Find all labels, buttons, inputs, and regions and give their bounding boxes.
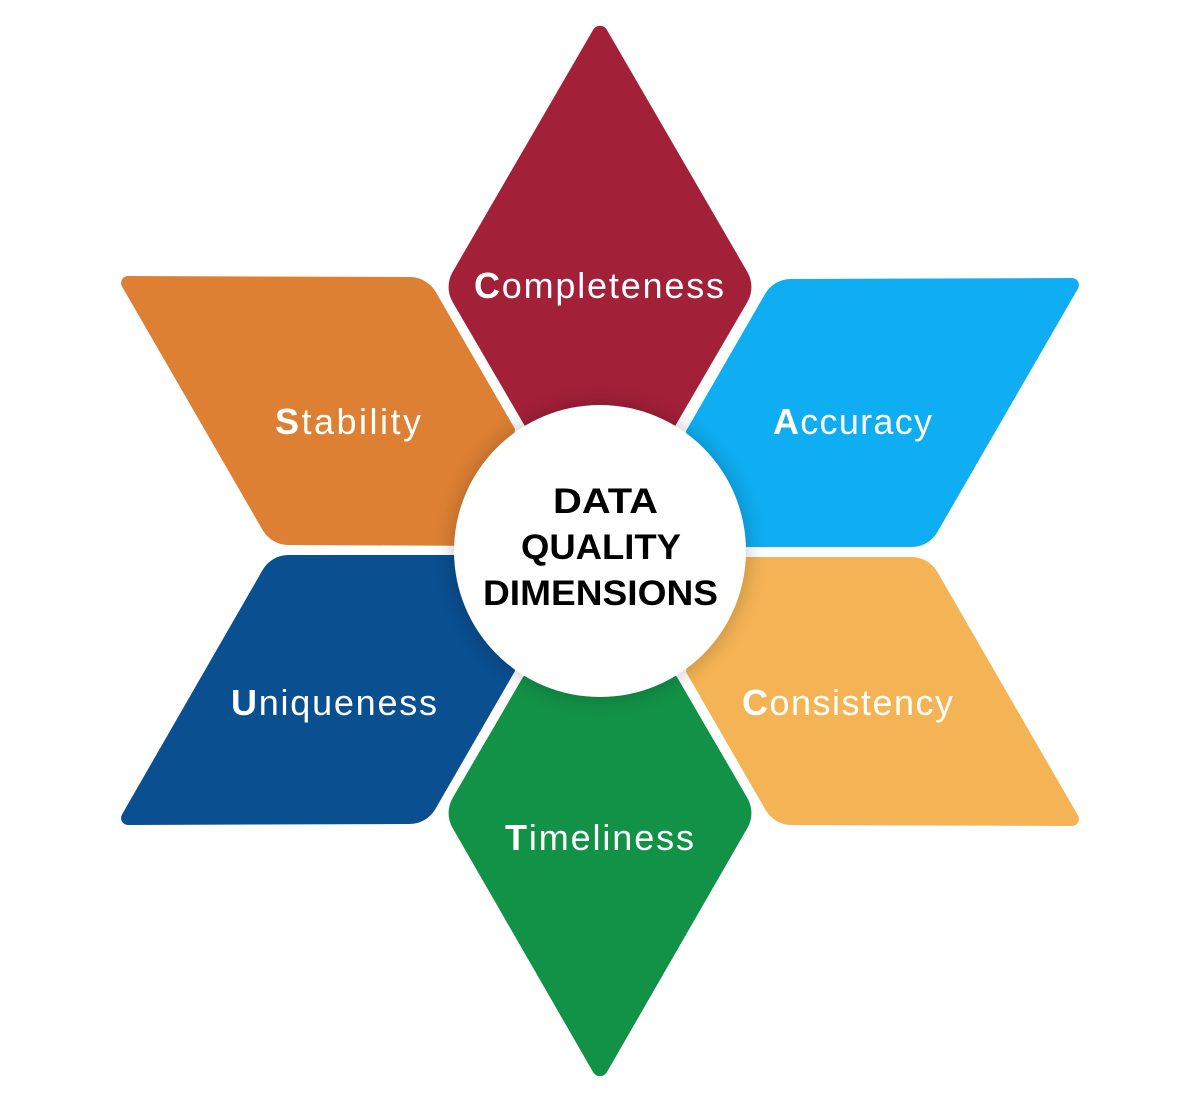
center circle with title: DIMENSIONS bbox=[483, 574, 718, 613]
center circle with title bbox=[454, 405, 746, 697]
panel: timeliness bbox=[449, 600, 751, 1076]
center circle shadow bbox=[453, 404, 747, 698]
panel: completeness bbox=[449, 26, 751, 452]
panel: completeness: Completeness bbox=[474, 265, 724, 306]
center circle with title: QUALITY bbox=[521, 528, 681, 567]
panel: uniqueness bbox=[121, 555, 515, 825]
panel: stability: Stability bbox=[275, 401, 421, 442]
panel: stability bbox=[121, 276, 515, 546]
center circle with title: DATA bbox=[553, 482, 658, 521]
panel: accuracy bbox=[686, 278, 1079, 547]
panel: timeliness: Timeliness bbox=[505, 817, 694, 858]
panel: consistency bbox=[686, 557, 1079, 826]
panel: accuracy: Accuracy bbox=[773, 401, 932, 442]
panel: uniqueness: Uniqueness bbox=[231, 682, 437, 723]
panel: consistency: Consistency bbox=[742, 682, 953, 723]
